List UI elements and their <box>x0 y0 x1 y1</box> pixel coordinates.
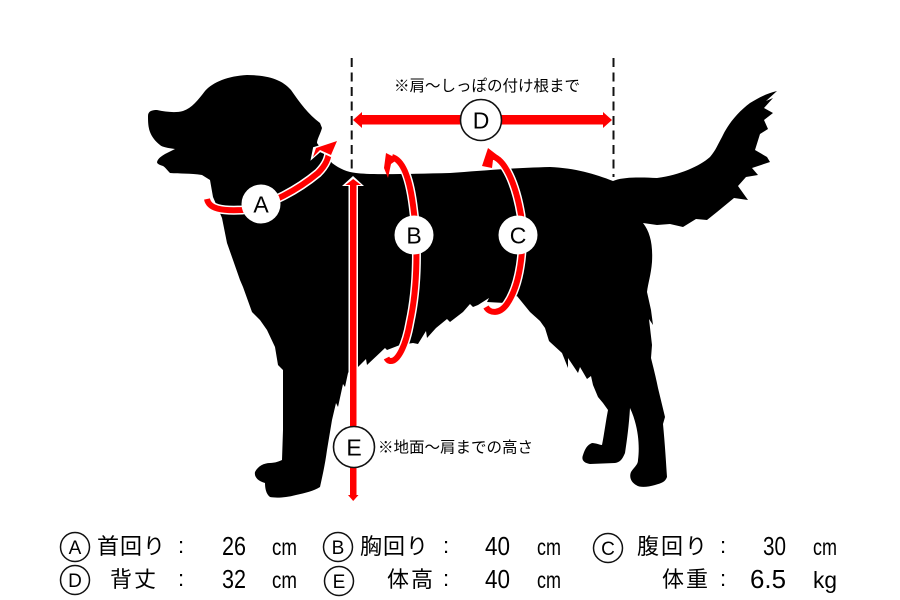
legend: neck: A <box>69 538 82 559</box>
dog silhouette <box>148 75 777 498</box>
arrow A: neck girth <box>207 141 337 210</box>
arrow D: back length <box>353 112 612 128</box>
legend: belly: cm <box>813 534 837 560</box>
marker D: D <box>473 108 489 134</box>
legend: weight: : <box>720 566 726 591</box>
marker D <box>460 100 502 140</box>
legend: chest: B <box>332 538 344 559</box>
legend: height <box>324 564 561 596</box>
note: height: ※地面〜肩までの高さ <box>378 438 533 456</box>
legend: back length <box>60 564 297 594</box>
marker E <box>334 426 374 468</box>
marker E: E <box>346 434 362 460</box>
legend: height: 体高 <box>387 567 433 592</box>
legend: belly: C <box>601 539 615 560</box>
legend: weight: kg <box>813 567 837 593</box>
legend: back length: cm <box>272 567 297 593</box>
arrow B: chest girth <box>384 153 416 361</box>
arrow C: belly girth <box>482 148 522 312</box>
marker A: A <box>253 192 269 218</box>
legend: chest: 胸回り <box>360 534 428 559</box>
legend: weight: 体重 <box>662 567 708 592</box>
legend: belly: : <box>720 533 726 558</box>
legend: neck: 首回り <box>97 534 165 559</box>
marker A <box>242 184 280 224</box>
legend: weight: 6.5 <box>750 564 786 594</box>
legend: back length: : <box>178 566 184 591</box>
marker C <box>498 216 538 254</box>
legend: height: cm <box>537 567 561 593</box>
legend: back length: 背丈 <box>110 567 156 592</box>
legend: chest: : <box>443 533 449 558</box>
legend: height: 40 <box>485 564 510 594</box>
shoulder dashed guide <box>351 58 353 170</box>
legend: neck: 26 <box>222 531 246 561</box>
legend: back length: 32 <box>222 564 246 594</box>
legend: height: E <box>333 572 345 593</box>
marker B <box>394 216 434 254</box>
legend: back length: D <box>68 571 82 592</box>
legend: belly: 腹回り <box>637 534 707 559</box>
legend: weight <box>662 564 837 594</box>
legend: belly <box>594 531 837 562</box>
note: back length: ※肩〜しっぽの付け根まで <box>394 77 580 95</box>
marker C: C <box>510 222 526 248</box>
arrow E: height <box>342 176 364 501</box>
legend: neck: cm <box>272 534 297 560</box>
legend: chest <box>324 531 561 562</box>
legend: neck <box>60 531 297 562</box>
tail-base dashed guide <box>612 58 614 177</box>
legend: height: : <box>443 566 449 591</box>
legend: chest: 40 <box>485 531 510 561</box>
legend: belly: 30 <box>763 531 786 561</box>
legend: neck: : <box>178 533 184 558</box>
marker B: B <box>406 222 422 248</box>
legend: chest: cm <box>537 534 561 560</box>
